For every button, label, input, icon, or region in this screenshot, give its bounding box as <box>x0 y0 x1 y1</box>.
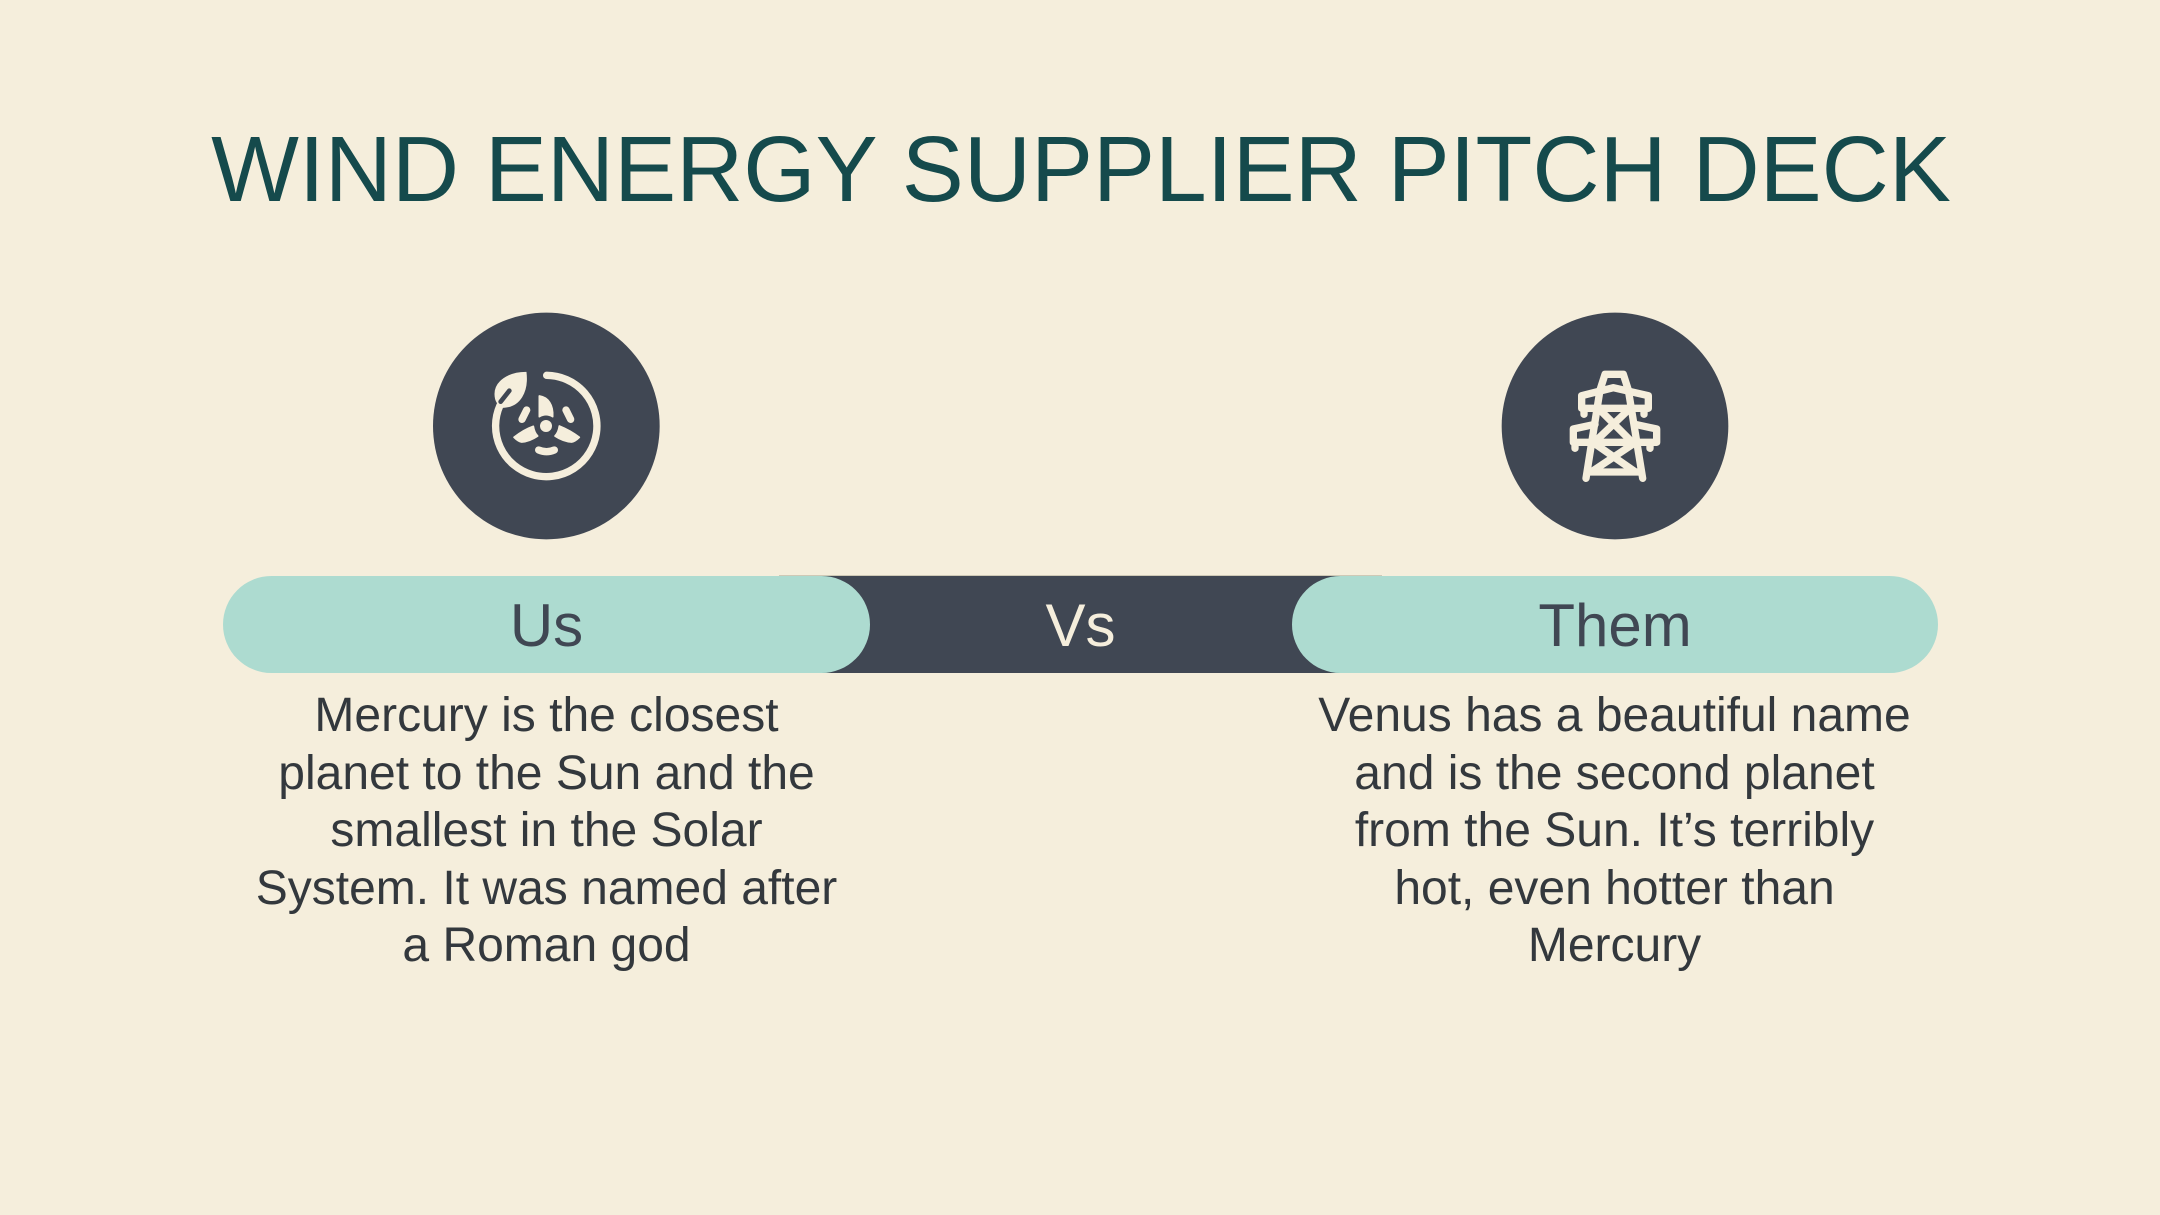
title: WIND ENERGY SUPPLIER PITCH DECK <box>211 117 1951 221</box>
text: Us description: Mercury is the closest <box>314 689 779 742</box>
text: Us description: System. It was named after <box>256 862 837 915</box>
pill: Us <box>223 576 870 673</box>
bar: Vs dark band <box>779 576 1382 673</box>
text: Us description <box>256 689 837 972</box>
text: Us description: a Roman god <box>402 919 691 972</box>
pill: Them: Them <box>1538 592 1692 659</box>
icon: wind turbine with leaf <box>433 312 660 540</box>
pill: Them <box>1292 576 1938 673</box>
text: Them description <box>1318 689 1911 972</box>
label: Vs: Vs <box>1045 592 1116 659</box>
text: Them description: Mercury <box>1528 919 1701 972</box>
text: Them description: and is the second planet <box>1354 747 1875 800</box>
text: Us description: planet to the Sun and the <box>278 747 815 800</box>
text: Us description: smallest in the Solar <box>330 804 763 857</box>
pill: Us: Us <box>510 592 583 659</box>
text: Them description: from the Sun. It’s terribly <box>1355 804 1874 857</box>
text: Them description: hot, even hotter than <box>1394 862 1835 915</box>
icon: transmission tower <box>1502 312 1728 540</box>
text: Them description: Venus has a beautiful name <box>1318 689 1911 742</box>
